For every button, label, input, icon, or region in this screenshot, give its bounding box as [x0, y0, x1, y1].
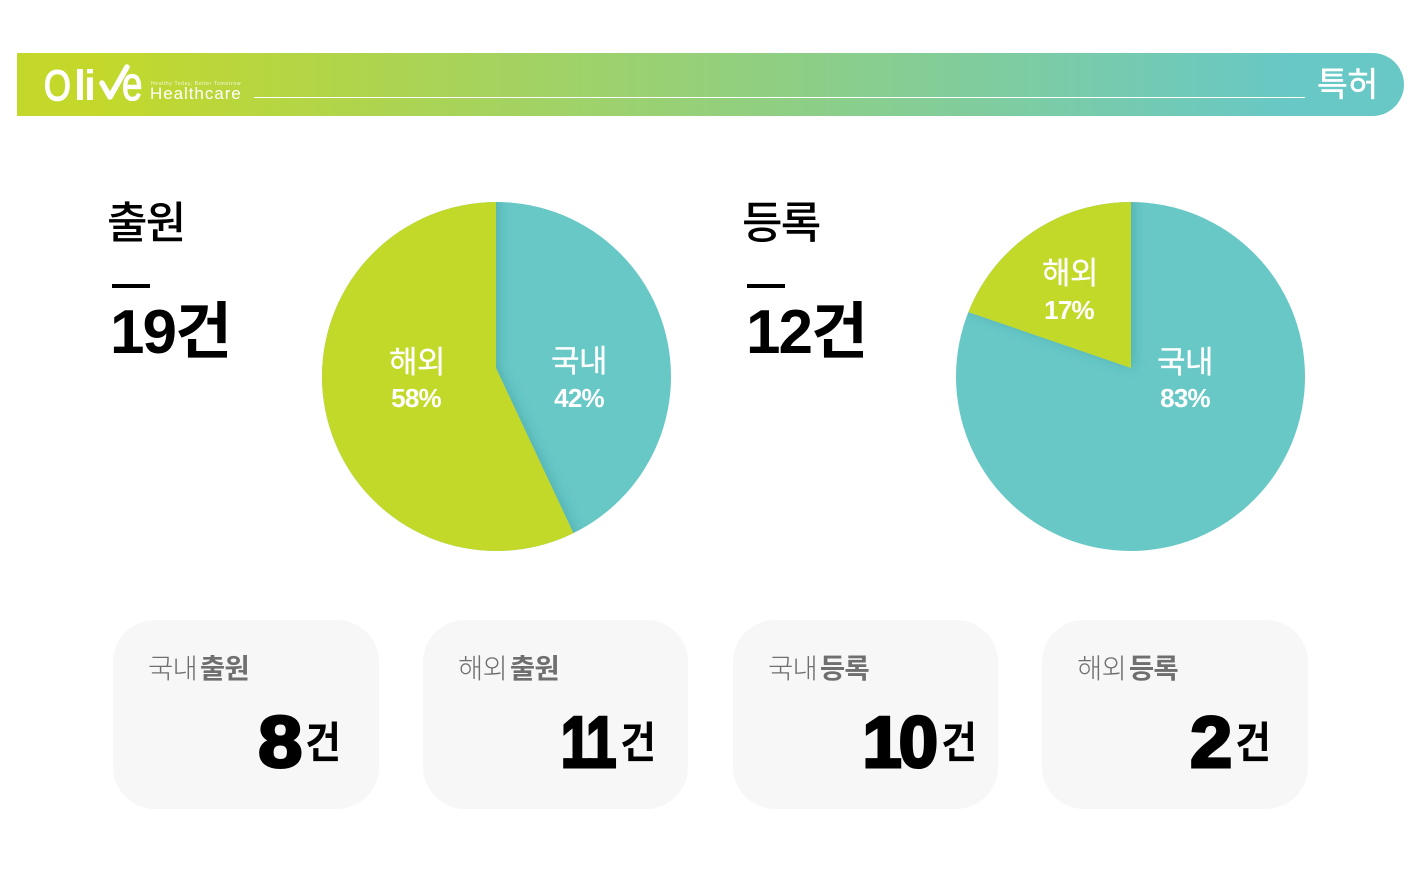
label: 해외 58%: 해외: [389, 345, 445, 380]
card value: 건: [620, 721, 656, 768]
total: 출원 19건: 19건: [110, 298, 230, 367]
label: 국내 42%: 42%: [554, 383, 604, 413]
header banner: [17, 53, 1404, 116]
logo: Olive Healthcare: Healthcare: [150, 84, 242, 103]
card value: 건: [1235, 721, 1271, 768]
card value: 2: [1190, 703, 1229, 783]
card: 국내 출원: [113, 620, 379, 809]
card: 국내 등록: [733, 620, 998, 809]
logo: Olive Healthcare: Healthy Today, Better Tomorrow: [151, 81, 241, 87]
card value: [1190, 703, 1271, 783]
heading: 등록: 등록: [742, 199, 820, 248]
pie chart: 출원: [322, 202, 671, 551]
dash: 출원: [112, 284, 150, 288]
header rule line: [254, 97, 1305, 98]
label: 해외 17%: 해외: [1042, 256, 1098, 291]
label: 해외 58%: [389, 345, 445, 413]
label: 국내 83%: 83%: [1160, 383, 1210, 413]
card label: 국내 출원: [148, 653, 249, 684]
label: 국내 42%: 국내: [551, 344, 607, 379]
card label: 해외 등록: [1077, 653, 1178, 684]
card value: [258, 703, 341, 783]
card: 해외 출원: [423, 620, 688, 809]
total: 등록 12건: 12건: [746, 298, 866, 367]
card value: 10: [862, 703, 935, 783]
card label: 국내 등록: [768, 653, 869, 684]
label: 국내 83%: [1157, 345, 1213, 413]
label: 해외 17%: [1042, 256, 1098, 325]
header title: 특허: [1317, 67, 1378, 104]
card value: 11: [561, 703, 614, 783]
card value: [862, 703, 977, 783]
card value: 건: [941, 721, 977, 768]
card label: 해외 출원: [458, 653, 559, 684]
label: 해외 58%: 58%: [391, 383, 441, 413]
card value: 8: [258, 703, 299, 783]
heading: 출원: 출원: [107, 199, 185, 248]
label: 국내 83%: 국내: [1157, 345, 1213, 380]
logo: Olive Healthcare: [44, 58, 242, 108]
pie chart: 등록: [956, 202, 1305, 551]
card: 해외 등록: [1042, 620, 1308, 809]
card value: 건: [305, 721, 341, 768]
dash: 등록: [747, 284, 785, 288]
card value: [561, 703, 656, 783]
label: 국내 42%: [551, 344, 607, 413]
label: 해외 17%: 17%: [1044, 295, 1094, 325]
